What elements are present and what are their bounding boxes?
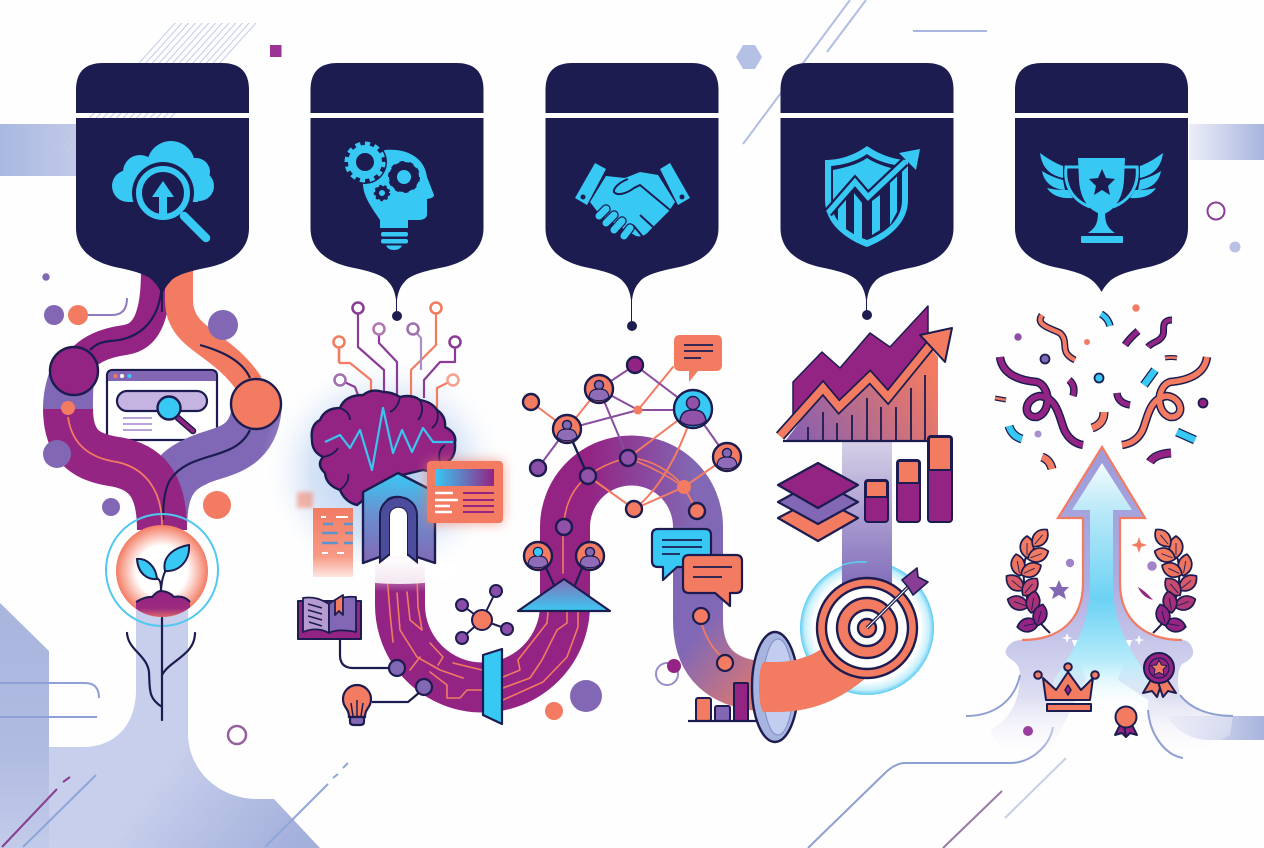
molecule [456, 585, 513, 644]
band top fade [370, 556, 430, 592]
panel 2 header [310, 63, 484, 321]
brain circuit traces [334, 302, 460, 410]
triangle gate [518, 579, 610, 611]
person: cyan hub [674, 390, 712, 428]
data card left [297, 492, 353, 577]
band nodes lower [693, 608, 733, 671]
person: gate right [576, 542, 604, 570]
magenta area [793, 306, 928, 425]
person: network top [585, 375, 613, 403]
confetti dots [1014, 304, 1208, 438]
panel 5 header [1015, 63, 1188, 292]
panel 4 header [780, 63, 954, 320]
floating dots [42, 273, 238, 519]
chat bubble coral [683, 555, 742, 606]
violet to coral band [698, 526, 860, 687]
confetti pieces [995, 314, 1195, 469]
violet right pathway [162, 400, 257, 530]
panel 1 header [76, 63, 249, 312]
chat bubble top [674, 335, 722, 382]
panel 3 header [546, 63, 718, 331]
open book [298, 595, 361, 639]
pathway lines [90, 278, 250, 520]
funnel rim [752, 632, 798, 742]
roots [127, 618, 195, 720]
chart bars [808, 375, 925, 441]
coral upper pathway [179, 270, 250, 385]
junction circles [50, 347, 98, 395]
icon: head bulb with gears [343, 140, 434, 250]
stage 1: merging pathways with browser and sprout [42, 270, 281, 720]
lightbulb [340, 640, 432, 725]
icon: winged trophy with star [1040, 153, 1163, 243]
baseline [783, 440, 938, 442]
ring decoration [656, 659, 681, 685]
cyan portal on band [483, 649, 502, 724]
stage 5: big rising arrow [1022, 447, 1182, 712]
magenta upper pathway [76, 270, 156, 368]
laurel left [1002, 525, 1052, 634]
small accents near arrow [1023, 537, 1157, 736]
stage 5: base arcs [966, 675, 1233, 758]
ribbon: left large [1000, 357, 1083, 445]
laurel right [1151, 525, 1201, 634]
stage 2 and 3: serpentine pathway [260, 335, 860, 724]
person: network left [553, 415, 581, 443]
rosette large [1143, 653, 1176, 697]
trend arrow [780, 343, 932, 436]
magenta lower pathway [68, 408, 162, 530]
icon: shield with growth arrow [825, 146, 920, 247]
violet left segment [43, 358, 95, 409]
growth chart [780, 306, 952, 441]
ribbon: right large [1122, 357, 1207, 445]
layered diamonds [778, 463, 858, 541]
network nodes [523, 357, 705, 535]
crown [1034, 663, 1099, 711]
coral band over funnel [759, 645, 865, 712]
person: network right [713, 443, 741, 471]
data card right [427, 461, 503, 523]
target rings and arrow [817, 562, 928, 678]
sprout in glowing circle [106, 514, 218, 626]
stage 4: target vertical column [842, 441, 892, 591]
circuit traces [387, 458, 684, 700]
rising bars [865, 436, 952, 522]
chat bubble cyan [652, 529, 711, 580]
small dots [545, 680, 602, 720]
stage 5: left mist [990, 640, 1086, 763]
stage 4: target glow [800, 561, 934, 695]
person: gate left [524, 542, 552, 570]
browser search window [107, 370, 217, 440]
U shaped circuit band [400, 461, 698, 688]
rosette small [1115, 706, 1137, 737]
magnifier over window [158, 396, 193, 431]
coral area [786, 345, 938, 441]
stage 5: right mist [1118, 640, 1233, 758]
icon: cloud with magnifier and arrow [112, 141, 214, 238]
person connectors [546, 568, 582, 585]
brain [312, 391, 455, 505]
network edges [531, 365, 727, 511]
mini bar chart [688, 683, 757, 721]
blue glow behind brain [260, 355, 510, 585]
ribbon: top right [1148, 320, 1172, 347]
arch gateway [338, 473, 462, 584]
stage 5: confetti [995, 304, 1208, 469]
icon: handshake [575, 163, 690, 237]
ribbon: top left [1040, 315, 1075, 360]
